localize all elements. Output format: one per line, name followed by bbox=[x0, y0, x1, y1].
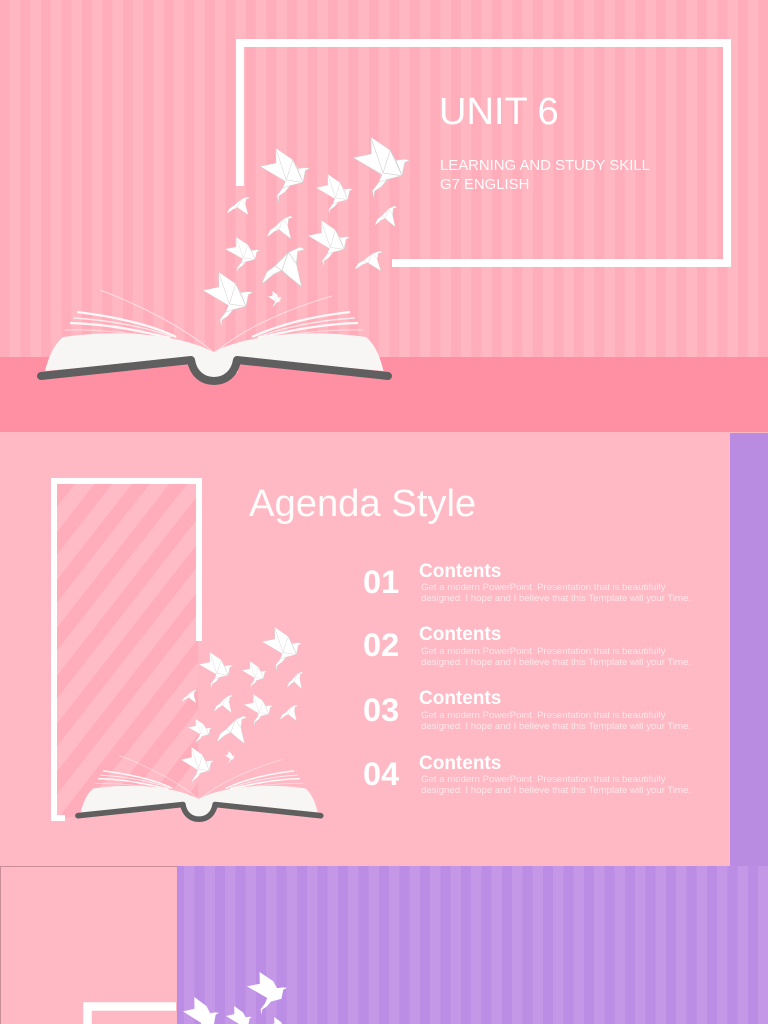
icon: origami birds small bbox=[181, 627, 303, 785]
slide 2 white frame bbox=[54, 481, 199, 818]
agenda item 01 bbox=[363, 561, 691, 604]
agenda item 01: Contents bbox=[419, 561, 501, 582]
agenda item 03: 03 bbox=[363, 692, 399, 728]
subtitle bbox=[440, 158, 650, 193]
panel: diagonal striped hatch bbox=[57, 484, 198, 818]
icon: open book bbox=[41, 290, 388, 384]
title: UNIT 6: UNIT 6 bbox=[439, 91, 559, 133]
agenda item 01: designed. I hope and I believe that this Template will your Time. bbox=[421, 593, 691, 604]
agenda item 04: Contents bbox=[419, 753, 501, 774]
agenda item 02: Contents bbox=[419, 624, 501, 645]
heading: Agenda Style: Agenda Style bbox=[249, 482, 476, 525]
agenda item 03: designed. I hope and I believe that this Template will your Time. bbox=[421, 721, 691, 732]
panel: slide 1 cover background bbox=[0, 0, 768, 358]
agenda item 02 bbox=[363, 624, 691, 668]
icon: white bird silhouettes bbox=[183, 972, 288, 1024]
agenda item 02: 02 bbox=[363, 627, 399, 663]
agenda item 04: designed. I hope and I believe that this Template will your Time. bbox=[421, 785, 691, 796]
panel: slide 3 pink block bbox=[0, 866, 178, 1024]
panel: slide 2 agenda background bbox=[0, 432, 768, 866]
agenda item 01: Get a modern PowerPoint Presentation that is beautifully bbox=[421, 582, 666, 593]
agenda item 04: Get a modern PowerPoint Presentation that is beautifully bbox=[421, 774, 666, 785]
agenda item 04 bbox=[363, 753, 691, 796]
agenda item 01: 01 bbox=[363, 564, 399, 600]
subtitle: G7 ENGLISH bbox=[440, 177, 529, 193]
agenda item 02: designed. I hope and I believe that this Template will your Time. bbox=[421, 657, 691, 668]
agenda item 03: Contents bbox=[419, 688, 501, 709]
slide 3 white frame bbox=[88, 1006, 176, 1024]
agenda item 04: 04 bbox=[363, 756, 399, 792]
icon: origami birds flying from the book bbox=[203, 137, 410, 327]
panel: slide 1 floor band bbox=[0, 357, 768, 432]
agenda item 02: Get a modern PowerPoint Presentation that is beautifully bbox=[421, 646, 666, 657]
subtitle: LEARNING AND STUDY SKILL bbox=[440, 158, 650, 174]
panel: slide 2 purple side bar bbox=[730, 433, 768, 866]
panel: slide 3 purple striped background bbox=[177, 866, 768, 1024]
icon: open book small bbox=[78, 756, 321, 821]
slide 1 white frame bbox=[240, 43, 727, 263]
agenda item 03: Get a modern PowerPoint Presentation that is beautifully bbox=[421, 710, 666, 721]
agenda item 03 bbox=[363, 688, 691, 732]
